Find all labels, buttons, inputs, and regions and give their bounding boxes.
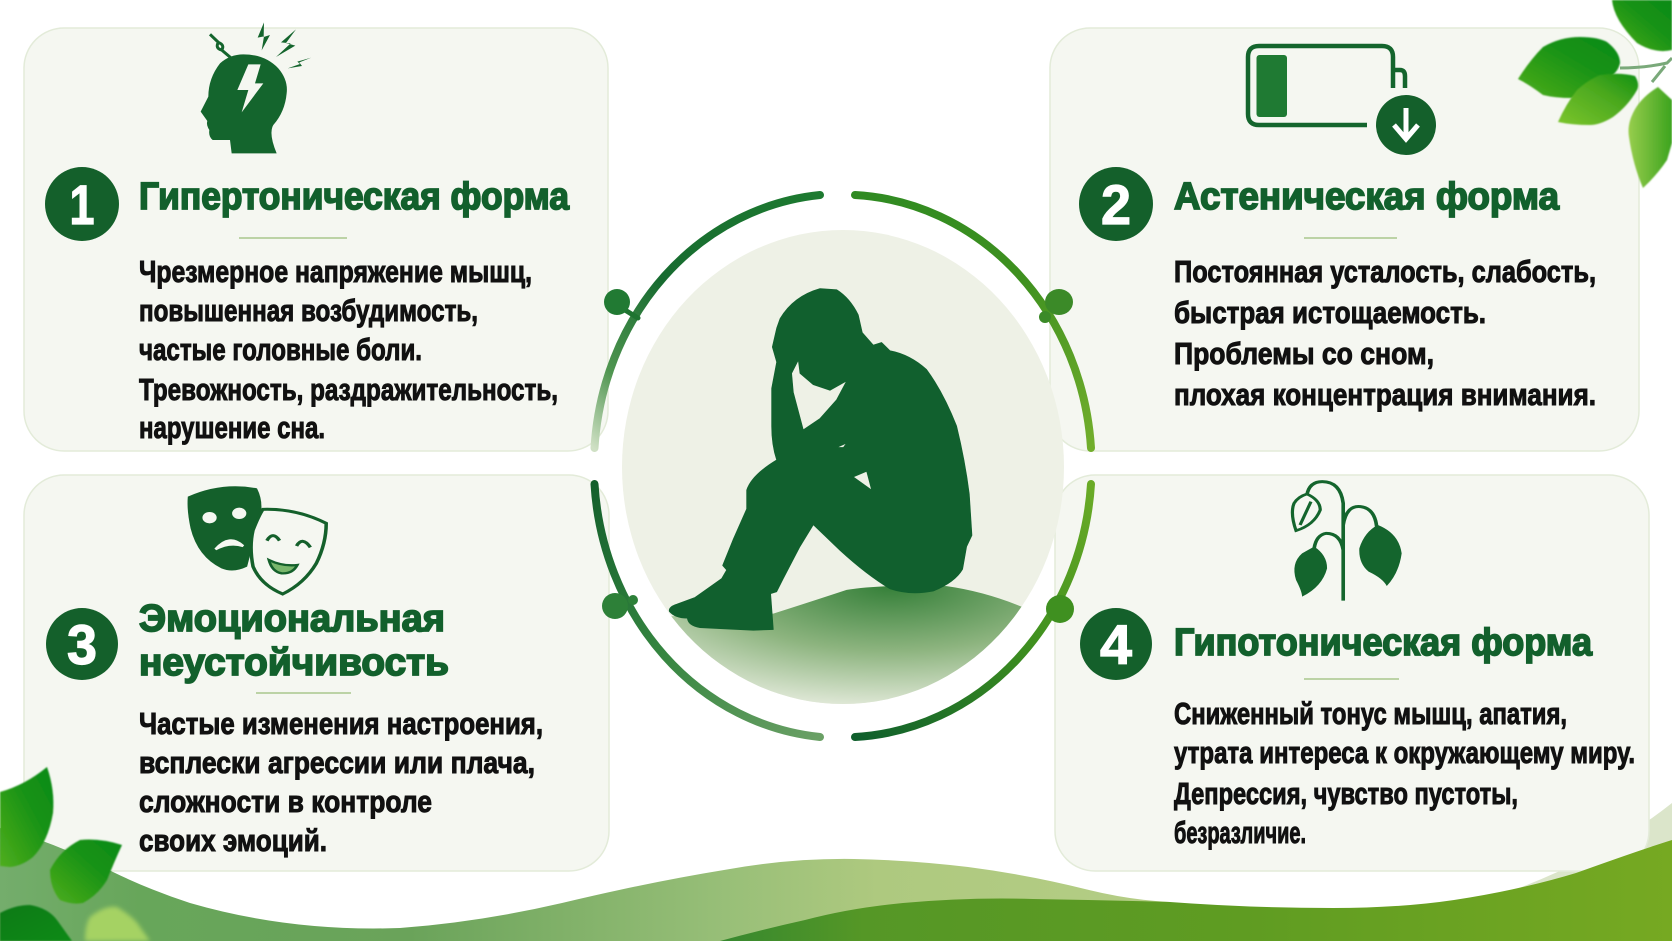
body text 4 — [1174, 696, 1635, 850]
body text 2: быстрая истощаемость. — [1174, 295, 1486, 330]
number badge 3: 3 — [67, 613, 97, 676]
decorative leaves: top right — [1518, 0, 1672, 188]
number badge 1 — [45, 167, 119, 241]
number badge 4 — [1080, 608, 1152, 680]
number badge 1: 1 — [70, 173, 94, 236]
body text 1: повышенная возбудимость, — [139, 293, 478, 328]
number badge 3 — [46, 608, 118, 680]
ground mound — [671, 586, 1022, 704]
ring: top-right arc with node — [855, 195, 1091, 448]
body text 1: Тревожность, раздражительность, — [139, 372, 558, 407]
icon: low battery — [1248, 46, 1436, 155]
central illustration: sitting person in a circle — [622, 230, 1064, 716]
body text 4: безразличие. — [1174, 815, 1306, 850]
panel 2: asthenic form — [1050, 28, 1639, 451]
background wave: dark front band — [720, 840, 1672, 941]
body text 2: плохая концентрация внимания. — [1174, 377, 1596, 412]
body text 1 — [139, 254, 558, 445]
background wave: right light band — [1500, 803, 1672, 895]
panel 1: hypertonic form — [24, 22, 608, 451]
ring: top-left arc with node — [594, 195, 820, 448]
number badge 2: 2 — [1101, 173, 1131, 236]
panel 3: emotional instability — [24, 475, 609, 871]
heading 1: Гипертоническая форма — [139, 176, 570, 218]
number badge 2 — [1079, 167, 1153, 241]
body text 3: всплески агрессии или плача, — [139, 745, 535, 780]
body text 4: Сниженный тонус мышц, апатия, — [1174, 696, 1567, 731]
icon: theatre masks — [188, 486, 326, 594]
icon: head with lightning — [201, 22, 311, 153]
body text 2 — [1174, 254, 1596, 412]
body text 3: своих эмоций. — [139, 823, 327, 858]
heading 3 — [139, 598, 449, 684]
panel 4: hypotonic form — [1055, 475, 1649, 871]
body text 1: Чрезмерное напряжение мышц, — [139, 254, 532, 289]
ring: bottom-right arc with node — [855, 484, 1091, 737]
body text 2: Проблемы со сном, — [1174, 336, 1434, 371]
number badge 4: 4 — [1100, 613, 1132, 676]
body text 3: Частые изменения настроения, — [139, 706, 543, 741]
body text 4: Депрессия, чувство пустоты, — [1174, 776, 1518, 811]
decorative leaves: bottom left — [0, 767, 150, 941]
body text 3: сложности в контроле — [139, 784, 432, 819]
heading 3: Эмоциональная — [139, 598, 445, 640]
body text 1: частые головные боли. — [139, 332, 422, 367]
background wave: lower left and centre hill — [0, 828, 1170, 941]
heading 4: Гипотоническая форма — [1174, 622, 1593, 664]
heading 3: неустойчивость — [139, 642, 449, 684]
heading 2: Астеническая форма — [1174, 176, 1560, 218]
ring: bottom-left arc with node — [594, 484, 820, 737]
silhouette of a sad person — [669, 289, 972, 630]
icon: wilted plant — [1292, 482, 1402, 601]
body text 3 — [139, 706, 543, 858]
body text 1: нарушение сна. — [139, 410, 325, 445]
